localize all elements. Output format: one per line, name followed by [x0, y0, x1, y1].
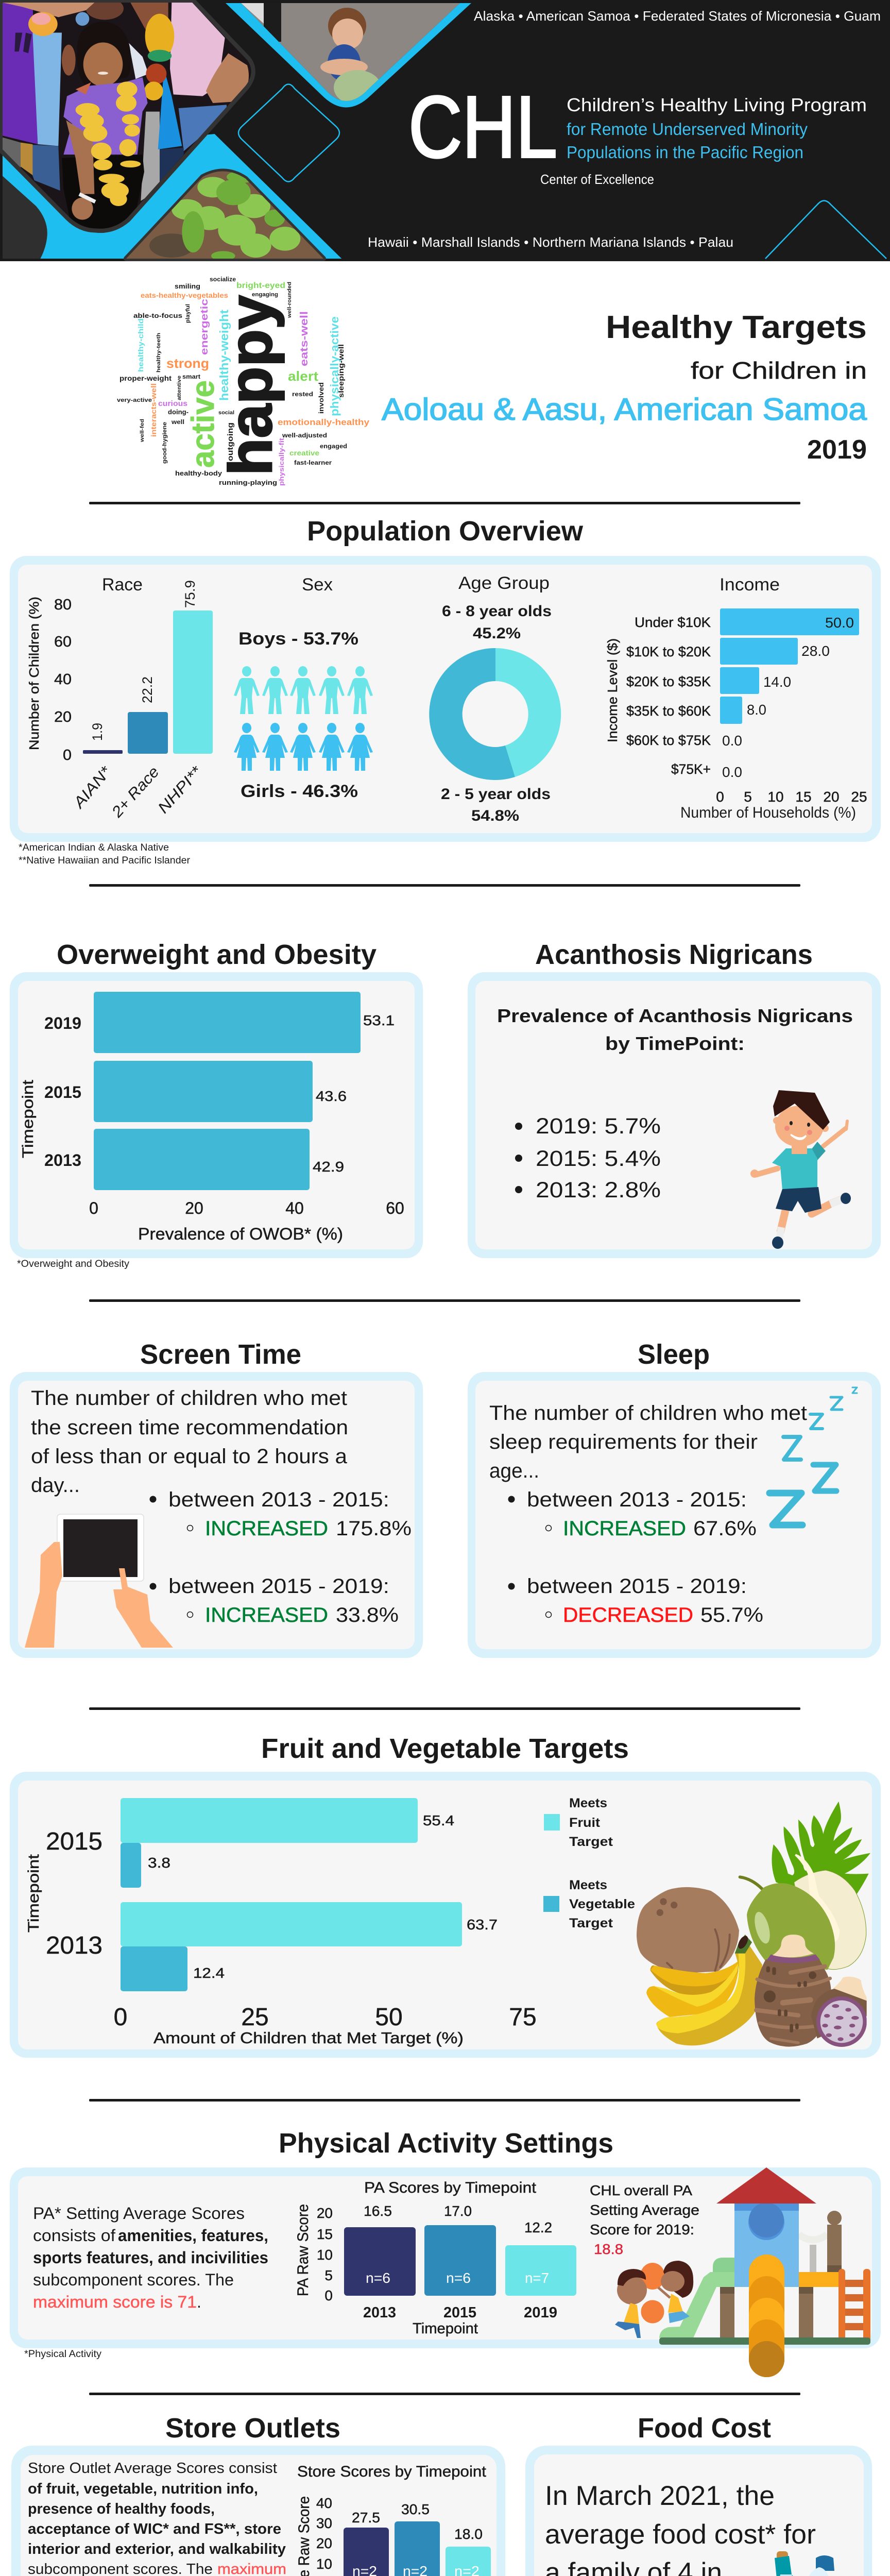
chart: race: 2+ Race	[108, 764, 163, 821]
callout: overall PA score: Setting Average	[590, 2202, 699, 2218]
intro text: age...	[489, 1460, 539, 1482]
heading: acanthosis nigricans: Acanthosis Nigricans	[535, 939, 813, 970]
word cloud: running-playing	[219, 479, 277, 486]
stats: 2013-2015	[149, 1488, 412, 1540]
food cost text: average food cost* for	[545, 2519, 816, 2550]
word cloud: healthy-weight	[217, 310, 231, 401]
bar chart: PA scores: PA Scores by Timepoint	[364, 2179, 537, 2196]
panel: acanthosis nigricans: by TimePoint:	[605, 1033, 745, 1054]
banner	[0, 0, 890, 261]
list of prevalence values	[515, 1114, 661, 1202]
bar chart: 75	[509, 2004, 537, 2031]
photo: toddler with greens	[241, 3, 460, 101]
bar chart: store scores: 18.0	[454, 2526, 483, 2542]
word cloud: interacts-well	[149, 383, 158, 437]
legend: Target	[569, 1835, 613, 1849]
year: 2019	[807, 435, 867, 465]
stats: 2015-2019: INCREASED	[205, 1604, 328, 1626]
panel: acanthosis nigricans: Prevalence of Acanthosis Nigricans	[497, 1005, 853, 1026]
callout: overall PA score	[590, 2182, 699, 2257]
panel: overweight and obesity chart: 43.6	[316, 1088, 347, 1104]
heading: food cost: Food Cost	[638, 2413, 771, 2444]
word cloud: playful	[185, 304, 191, 323]
word cloud: eats-healthy-vegetables	[141, 291, 228, 299]
breadfruit	[740, 1877, 762, 1889]
bar chart: store scores: Store Scores by Timepoint	[297, 2463, 487, 2480]
bar chart: PA scores: Timepoint	[413, 2320, 478, 2337]
bar chart: PA scores: 20	[317, 2205, 333, 2221]
stats: 2013-2015: between 2013 - 2015:	[527, 1488, 747, 1511]
bar chart: PA scores: PA Raw Score	[295, 2204, 312, 2296]
chart: income: 0.0	[722, 764, 742, 780]
heading: store outlets: Store Outlets	[165, 2413, 340, 2444]
intro text: sleep requirements for their	[489, 1431, 758, 1453]
chart: income: 25	[851, 789, 867, 805]
stats: 2015-2019: DECREASED	[563, 1604, 693, 1626]
regions list top: Alaska • American Samoa • Federated States of Micronesia • Guam	[474, 8, 881, 24]
word cloud: able-to-focus	[133, 312, 182, 319]
panel: store outlets	[11, 2446, 505, 2576]
chart: income: $75K+	[671, 761, 711, 777]
regions list bottom: Hawaii • Marshall Islands • Northern Mariana Islands • Palau	[368, 234, 733, 250]
bar chart: Amount of Children that Met Target (%)	[153, 2029, 464, 2047]
word cloud: well-fed	[140, 419, 145, 443]
chart: income: $10K to $20K	[626, 644, 711, 659]
panel: physical activity settings	[10, 2167, 881, 2348]
chart: race: 22.2	[140, 676, 155, 703]
word cloud: eats-well	[299, 311, 310, 366]
program name: Children’s Healthy Living Program	[567, 94, 867, 115]
chart: income: 20	[823, 789, 840, 805]
chart: income	[605, 575, 867, 821]
description text: subcomponent scores. The	[33, 2270, 234, 2289]
chart: income: 8.0	[747, 702, 766, 718]
word cloud: strong	[166, 355, 209, 371]
bar chart: PA scores: 2019	[524, 2304, 557, 2321]
kids playing basketball	[615, 2261, 693, 2338]
chart: race: 75.9	[182, 580, 198, 608]
bar chart: PA scores: 15	[317, 2226, 333, 2242]
location: Aoloau & Aasu, American Samoa	[382, 392, 867, 427]
coconut	[637, 1887, 739, 1973]
list of prevalence values: 2015: 5.4%	[536, 1146, 661, 1171]
main title: Healthy Targets	[606, 310, 867, 345]
chart: income: Income	[720, 575, 780, 595]
chart: income: Income Level ($)	[605, 638, 620, 742]
intro text	[489, 1402, 807, 1482]
food cost text	[544, 2481, 816, 2576]
icon: running boy	[750, 1090, 851, 1249]
title block	[382, 310, 867, 465]
chart: age group donut: 54.8%	[471, 807, 519, 824]
word cloud: emotionally-healthy	[278, 417, 370, 427]
panel: overweight and obesity chart: 60	[386, 1199, 404, 1217]
bar chart: store scores	[296, 2463, 491, 2576]
description text: .	[197, 2293, 201, 2311]
intro text: the screen time recommendation	[31, 1416, 348, 1439]
word cloud: socialize	[210, 276, 236, 283]
bar chart: PA scores: 12.2	[524, 2219, 552, 2235]
bar chart: 0	[114, 2004, 127, 2031]
bananas	[651, 1961, 738, 1996]
legend: Fruit	[569, 1816, 601, 1830]
word cloud: rested	[292, 391, 313, 398]
word cloud: creative	[289, 449, 319, 457]
stats: 2015-2019	[508, 1575, 763, 1626]
panel: overweight and obesity chart: 0	[89, 1199, 98, 1217]
word cloud: social	[218, 410, 234, 416]
panel: screen time	[10, 1372, 423, 1658]
description text: consists of	[33, 2226, 115, 2245]
bar chart: 3.8	[148, 1855, 170, 1871]
panel: overweight and obesity chart: Prevalence of OWOB* (%)	[138, 1225, 343, 1243]
taro	[755, 1959, 831, 2047]
description text: maximum score is 71	[33, 2293, 197, 2311]
word cloud: curious	[158, 399, 187, 408]
bar chart: 12.4	[193, 1965, 225, 1981]
stats: 2013-2015: 175.8%	[336, 1517, 412, 1540]
chart: sex pictogram: Boys - 53.7%	[238, 629, 358, 649]
description text: of fruit, vegetable, nutrition info,	[28, 2481, 258, 2497]
photo: lettuce garden	[120, 165, 326, 261]
heading: overweight and obesity: Overweight and Obesity	[57, 939, 376, 970]
bar chart: 25	[241, 2004, 269, 2031]
chart: income: Under $10K	[635, 615, 711, 630]
bar chart: PA scores: 5	[324, 2267, 333, 2283]
word cloud: physically-active	[328, 316, 341, 416]
chart: age group donut: 45.2%	[473, 625, 521, 642]
word cloud: very-active	[117, 397, 152, 403]
chart: income: 5	[744, 789, 752, 805]
bar chart: store scores: 30	[316, 2515, 332, 2531]
open breadfruit	[794, 1870, 866, 1970]
panel: overweight and obesity chart: Timepoint	[20, 1079, 37, 1158]
chart: race	[26, 575, 213, 821]
panel: sleep	[468, 1372, 881, 1658]
word cloud: physically-fit	[278, 437, 285, 486]
chart: race: 80	[54, 597, 72, 613]
bar chart	[25, 1798, 537, 2047]
description text: presence of healthy foods,	[28, 2501, 215, 2517]
bar chart: Timepoint	[25, 1854, 42, 1933]
blue corner shape	[3, 134, 341, 259]
stats: 2013-2015: INCREASED	[205, 1517, 328, 1540]
bar chart: store scores: 20	[316, 2535, 332, 2551]
footnote: overweight: *Overweight and Obesity	[17, 1259, 130, 1269]
heading: sleep: Sleep	[638, 1339, 710, 1370]
bar chart: PA scores: 17.0	[444, 2203, 472, 2219]
chart: race: NHPI**	[155, 762, 206, 817]
icon: grocery bag	[741, 2551, 883, 2576]
bar chart: PA scores	[295, 2179, 576, 2337]
legend: Target	[569, 1916, 613, 1930]
word cloud: well-adjusted	[282, 432, 327, 439]
word cloud: proper-weight	[119, 374, 172, 382]
diamond outline	[238, 84, 339, 181]
word cloud: healthy-body	[175, 469, 222, 477]
bar chart: 63.7	[467, 1917, 498, 1933]
bar chart: PA scores: 0	[324, 2287, 333, 2303]
word cloud: involved	[317, 382, 325, 414]
chart: income: 14.0	[763, 674, 791, 690]
chart: race: Number of Children (%)	[26, 597, 42, 750]
panel: overweight and obesity chart: 42.9	[313, 1159, 344, 1175]
word cloud: well	[171, 418, 184, 426]
chart: race: 20	[54, 709, 72, 725]
panel: acanthosis nigricans	[468, 972, 881, 1258]
chart: age group donut: 6 - 8 year olds	[442, 603, 552, 620]
food cost text: In March 2021, the	[545, 2481, 775, 2511]
bar chart: store scores: 27.5	[352, 2510, 380, 2526]
chart: race: Race	[102, 575, 143, 595]
panel: overweight and obesity chart: 53.1	[363, 1012, 395, 1028]
panel: overweight and obesity chart: 2019	[44, 1014, 81, 1032]
chart: income: $20K to $35K	[626, 674, 711, 689]
chart: income: 10	[767, 789, 784, 805]
bar chart: PA scores: n=6	[446, 2270, 471, 2286]
chart: race: AIAN*	[70, 763, 115, 812]
word cloud: happy	[217, 295, 285, 476]
stats: 2015-2019	[149, 1575, 399, 1626]
bar chart: PA scores: 10	[317, 2247, 333, 2263]
intro text	[31, 1387, 348, 1497]
description text: Store Outlet Average Scores consist	[28, 2460, 277, 2477]
description text	[28, 2460, 286, 2576]
bar chart: 2015	[46, 1828, 102, 1855]
stats: 2015-2019: between 2015 - 2019:	[527, 1575, 747, 1598]
panel: fruit and vegetable targets	[10, 1772, 881, 2058]
stats: 2013-2015: between 2013 - 2015:	[168, 1488, 389, 1511]
word cloud: bright-eyed	[236, 281, 285, 290]
word cloud: alert	[288, 368, 318, 384]
panel: overweight and obesity chart: 40	[285, 1199, 304, 1217]
footnotes: population	[19, 842, 191, 866]
bar chart: store scores: 10	[316, 2556, 332, 2572]
bar chart: PA scores: 2013	[363, 2304, 396, 2321]
word cloud	[117, 276, 370, 486]
blue chevron stripe	[226, 3, 471, 107]
chart: income: 28.0	[801, 643, 830, 659]
legend: Meets	[569, 1878, 607, 1892]
word cloud: attentive	[176, 376, 182, 400]
chart: race: 40	[54, 671, 72, 688]
icon: sleeping Zs	[769, 1387, 857, 1525]
word cloud: engaging	[252, 292, 278, 298]
leaf	[772, 1802, 870, 1900]
description text: interior and exterior, and walkability	[28, 2541, 286, 2557]
CHL logo text: CHL	[408, 78, 557, 176]
stats: 2015-2019: 55.7%	[700, 1604, 763, 1626]
word cloud: healthy-child	[136, 318, 145, 372]
chart: income: $35K to $60K	[626, 703, 711, 719]
word cloud: good-hygiene	[162, 422, 168, 464]
panel: food cost	[525, 2446, 883, 2576]
footnote: physical activity: *Physical Activity	[24, 2349, 102, 2360]
chart: sex pictogram: Sex	[302, 575, 333, 595]
chart: income: Number of Households (%)	[680, 804, 856, 821]
bar chart: PA scores: n=6	[366, 2270, 390, 2286]
description text	[33, 2204, 268, 2311]
legend: Vegetable	[569, 1897, 635, 1911]
word cloud: smart	[182, 373, 200, 380]
word cloud: active	[185, 380, 221, 468]
intro text: day...	[31, 1474, 80, 1497]
bar chart: PA scores: n=7	[525, 2270, 549, 2286]
bar chart: store scores: 30.5	[401, 2501, 430, 2517]
panel: population overview	[10, 556, 881, 842]
word cloud: smiling	[175, 282, 200, 290]
legend	[543, 1796, 635, 1930]
heading: screen time: Screen Time	[140, 1339, 301, 1370]
chart: race: 60	[54, 634, 72, 650]
stats: 2013-2015: 67.6%	[693, 1517, 757, 1540]
list of prevalence values: 2013: 2.8%	[536, 1178, 661, 1202]
heading: fruit and vegetable targets: Fruit and Vegetable Targets	[261, 1733, 629, 1764]
chart: income: 15	[795, 789, 812, 805]
intro text: The number of children who met	[489, 1402, 807, 1425]
heading: physical activity settings: Physical Activity Settings	[279, 2128, 613, 2159]
chart: race: 1.9	[90, 723, 105, 741]
icon: tablet and hands	[25, 1514, 173, 1648]
bar chart: 50	[375, 2004, 403, 2031]
callout: overall PA score: CHL overall PA	[590, 2182, 692, 2198]
chart: income: 0.0	[722, 733, 742, 749]
bar chart: PA scores: 2015	[443, 2304, 476, 2321]
program subtitle line 2: Populations in the Pacific Region	[567, 143, 803, 162]
photo: child with leis	[0, 0, 268, 241]
description text: amenities, features,	[118, 2226, 268, 2245]
bar chart: PA scores: 16.5	[364, 2203, 392, 2219]
word cloud: fast-learner	[294, 459, 332, 466]
chart: age group donut: 2 - 5 year olds	[441, 786, 551, 803]
subtitle: for Children in	[691, 357, 867, 384]
panel: overweight and obesity chart: 2013	[44, 1151, 81, 1170]
word cloud: sleeping-well	[337, 344, 345, 398]
panel: overweight and obesity chart	[10, 972, 423, 1258]
legend: Meets	[569, 1796, 607, 1810]
chart: income: $60K to $75K	[626, 733, 711, 748]
bar chart: 2013	[46, 1932, 102, 1959]
heading: population overview: Population Overview	[307, 516, 584, 547]
word cloud: well-rounded	[287, 282, 293, 318]
panel: overweight and obesity chart: 20	[185, 1199, 203, 1217]
chart: race: 0	[63, 747, 72, 764]
word cloud: doing-	[168, 408, 189, 416]
program subtitle line 1: for Remote Underserved Minority	[567, 120, 808, 139]
bar chart: store scores: 40	[316, 2495, 332, 2511]
stats: 2015-2019: between 2015 - 2019:	[168, 1575, 389, 1598]
word cloud: energetic	[199, 298, 210, 355]
intro text: The number of children who met	[31, 1387, 347, 1410]
stats: 2013-2015: INCREASED	[563, 1517, 686, 1540]
intro text: of less than or equal to 2 hours a	[31, 1445, 348, 1468]
stats: 2013-2015	[508, 1488, 757, 1540]
chart: age group donut	[429, 573, 561, 824]
callout: overall PA score: Score for 2019:	[590, 2222, 694, 2238]
triangle outline	[765, 201, 886, 259]
list of prevalence values: 2019: 5.7%	[536, 1114, 661, 1139]
description text: acceptance of WIC* and FS**, store	[28, 2521, 281, 2537]
description text: sports features, and incivilities	[33, 2248, 268, 2267]
chart: age group donut: Age Group	[458, 573, 550, 593]
icon: playground with kids	[615, 2167, 870, 2377]
taro slice	[833, 1977, 867, 2003]
callout: overall PA score: 18.8	[594, 2241, 623, 2257]
stats: 2015-2019: 33.8%	[336, 1604, 399, 1626]
footnotes: population: **Native Hawaiian and Pacific Islander	[19, 855, 191, 866]
bar chart: 55.4	[423, 1812, 454, 1828]
panel: overweight and obesity chart: 2015	[44, 1083, 81, 1101]
chart: income: 50.0	[825, 615, 854, 631]
chart: sex pictogram	[234, 575, 373, 801]
word cloud: engaged	[320, 443, 347, 450]
footnotes: population: *American Indian & Alaska Native	[19, 842, 169, 853]
description text: PA* Setting Average Scores	[33, 2204, 245, 2223]
chart: sex pictogram: Girls - 46.3%	[241, 782, 358, 801]
icon: tropical fruits	[637, 1802, 870, 2047]
left collage scaled group	[0, 0, 341, 261]
center of excellence: Center of Excellence	[540, 172, 654, 187]
word cloud: outgoing	[226, 422, 235, 461]
chart: income: 0	[716, 789, 724, 805]
word cloud: healthy-teeth	[156, 333, 162, 372]
